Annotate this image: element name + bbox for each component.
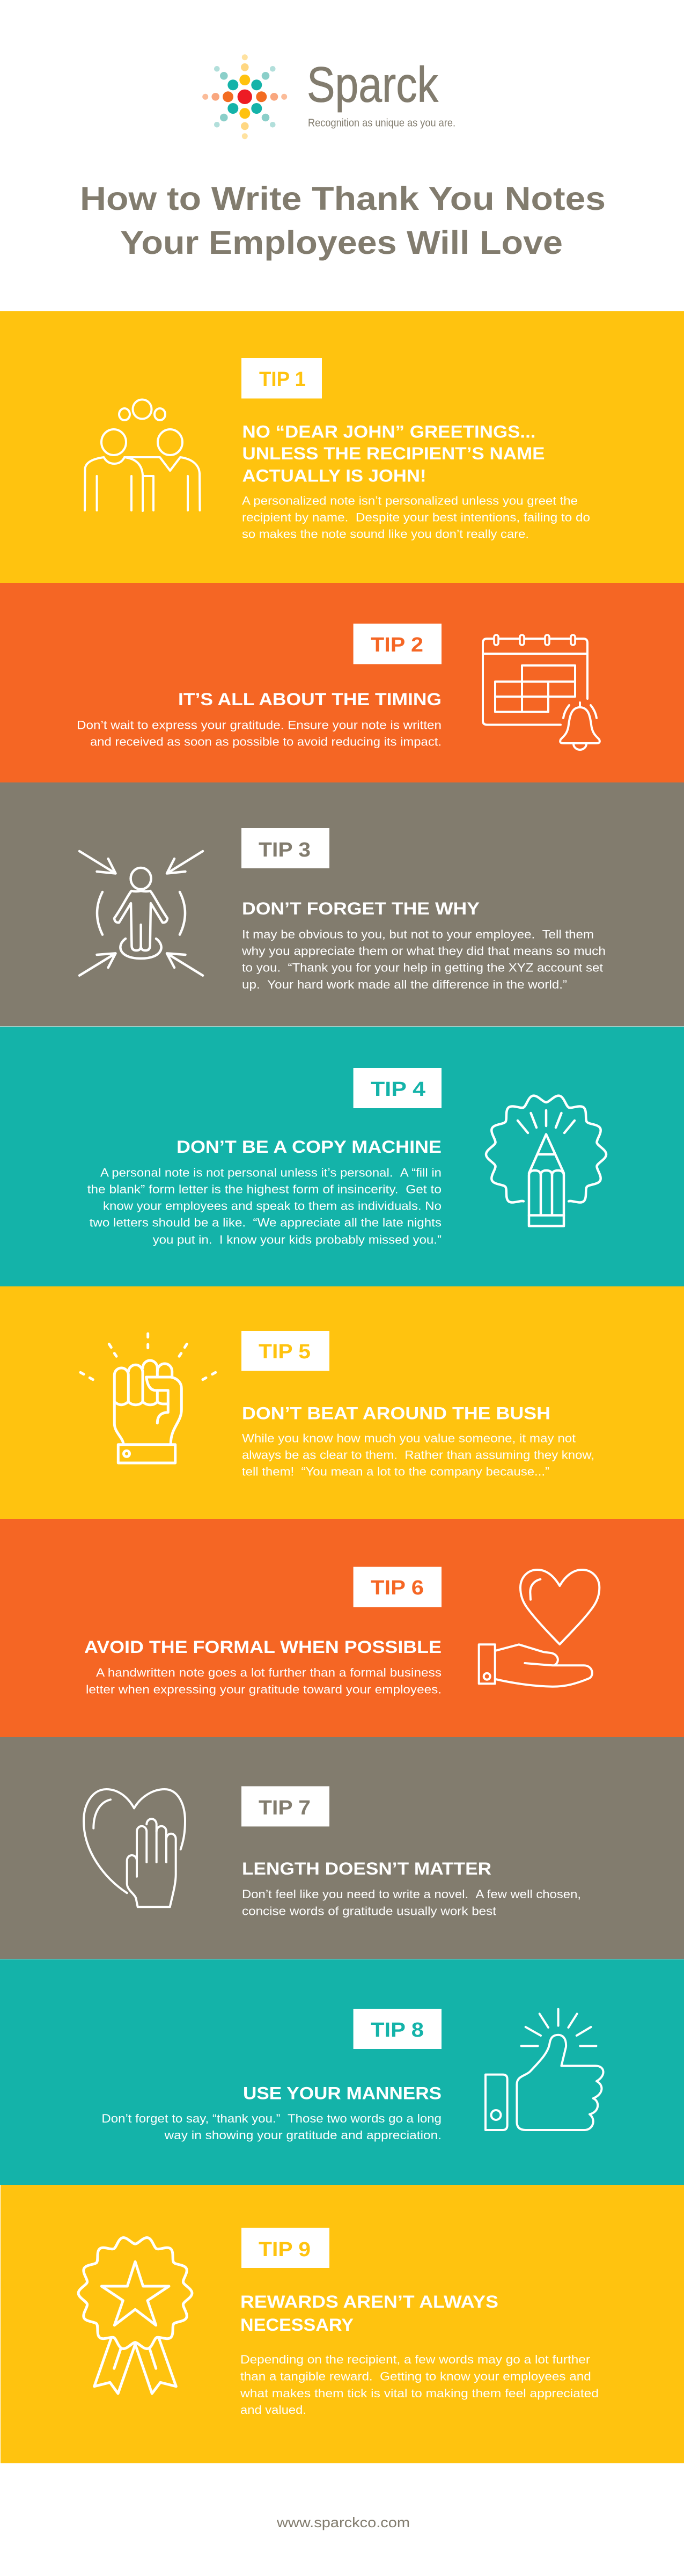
tip 4 text xyxy=(87,1166,442,1246)
tip 6 heading: AVOID THE FORMAL WHEN POSSIBLE xyxy=(84,1637,442,1657)
title xyxy=(80,180,606,261)
tip 1 badge: TIP 1 xyxy=(259,368,306,391)
logo mark: dots xyxy=(202,54,287,139)
tip 7 text xyxy=(242,1887,581,1918)
panel: tip 5 xyxy=(0,1286,684,1519)
tip 7 text: Don’t feel like you need to write a novel. A few well chosen, xyxy=(242,1887,581,1901)
icon: calendar with bell xyxy=(483,635,600,750)
tip 5 badge: TIP 5 xyxy=(259,1341,311,1363)
icon: pencil with burst xyxy=(486,1093,606,1226)
tip 1 text xyxy=(242,494,590,540)
logo tagline: Recognition as unique as you are. xyxy=(308,118,455,129)
tip 4 text: you put in. I know your kids probably missed you.” xyxy=(153,1233,442,1246)
tip 7 badge: TIP 7 xyxy=(259,1797,311,1819)
tip 4 text: know your employees and speak to them as individuals. No xyxy=(103,1199,442,1213)
tip 9 heading xyxy=(240,2292,498,2334)
tip 9 badge xyxy=(241,2228,329,2268)
tip 4 badge xyxy=(354,1068,442,1108)
tip 8 text: way in showing your gratitude and appreciation. xyxy=(164,2128,442,2142)
tip 1 heading: UNLESS THE RECIPIENT’S NAME xyxy=(242,444,545,463)
tip 8 text: Don’t forget to say, “thank you.” Those two words go a long xyxy=(101,2112,442,2125)
tip 3 heading: DON’T FORGET THE WHY xyxy=(242,899,480,918)
tip 3 text: to you. “Thank you for your help in getting the XYZ account set xyxy=(242,961,603,975)
tip 3 text: It may be obvious to you, but not to your employee. Tell them xyxy=(242,927,594,941)
tip 3 text xyxy=(241,927,606,991)
tip 2 text: Don’t wait to express your gratitude. Ensure your note is written xyxy=(77,719,442,732)
tip 3 text: up. Your hard work made all the difference in the world.” xyxy=(242,978,567,991)
tip 2 text xyxy=(77,719,442,749)
tip 1 heading xyxy=(242,422,545,485)
tip 3 badge xyxy=(241,828,329,868)
tip 5 text: always be as clear to them. Rather than assuming they know, xyxy=(242,1448,594,1462)
tip 6 text: letter when expressing your gratitude toward your employees. xyxy=(86,1682,442,1696)
tip 1 text: recipient by name. Despite your best intentions, failing to do xyxy=(242,511,590,524)
icon: two people with thought bubbles xyxy=(85,399,200,511)
tip 5 heading: DON’T BEAT AROUND THE BUSH xyxy=(242,1404,550,1423)
tip 5 badge xyxy=(241,1331,329,1371)
tip 3 badge: TIP 3 xyxy=(259,839,311,861)
tip 1 heading: NO “DEAR JOHN” GREETINGS... xyxy=(242,422,535,441)
tip 5 text xyxy=(242,1432,594,1478)
footer url: www.sparckco.com xyxy=(276,2514,410,2530)
tip 4 text: A personal note is not personal unless it’s personal. A “fill in xyxy=(100,1166,442,1180)
tip 1 text: so makes the note sound like you don’t really care. xyxy=(242,527,529,540)
tip 8 badge: TIP 8 xyxy=(371,2019,424,2041)
title: Your Employees Will Love xyxy=(120,224,563,261)
tip 5 text: While you know how much you value someone, it may not xyxy=(242,1432,576,1445)
icon: raised fist xyxy=(80,1334,216,1463)
tip 2 text: and received as soon as possible to avoid reducing its impact. xyxy=(90,735,442,749)
logo: Sparck xyxy=(202,54,455,139)
tip 6 text xyxy=(86,1666,442,1696)
icon: person with arrows xyxy=(79,851,203,976)
tip 3 text: why you appreciate them or what they did that means so much xyxy=(241,945,606,958)
tip 2 badge: TIP 2 xyxy=(371,634,423,656)
tip 4 heading: DON’T BE A COPY MACHINE xyxy=(176,1137,442,1157)
tip 9 text: Depending on the recipient, a few words may go a lot further xyxy=(240,2353,590,2366)
tip 9 heading: REWARDS AREN’T ALWAYS xyxy=(240,2292,498,2311)
tip 8 text xyxy=(101,2112,442,2142)
panel: tip 2 xyxy=(0,583,684,782)
title: How to Write Thank You Notes xyxy=(80,180,606,217)
tip 9 heading: NECESSARY xyxy=(240,2315,354,2334)
tip 6 text: A handwritten note goes a lot further than a formal business xyxy=(96,1666,442,1679)
tip 5 text: tell them! “You mean a lot to the company because...” xyxy=(242,1465,549,1478)
tip 8 badge xyxy=(354,2009,442,2049)
tip 9 text: than a tangible reward. Getting to know your employees and xyxy=(240,2369,591,2383)
panel: tip 4 xyxy=(0,1026,684,1286)
tip 9 text xyxy=(240,2353,599,2417)
panel: tip 9 xyxy=(1,2185,684,2463)
tip 9 badge: TIP 9 xyxy=(259,2238,311,2261)
icon: hand holding heart xyxy=(479,1570,599,1687)
tip 4 text: two letters should be a like. “We appreciate all the late nights xyxy=(90,1216,442,1230)
tip 1 badge xyxy=(241,358,322,398)
icon: thumbs up xyxy=(486,2009,604,2130)
tip 1 text: A personalized note isn’t personalized unless you greet the xyxy=(242,494,578,508)
icon: award ribbon with star xyxy=(78,2235,192,2394)
logo wordmark: Sparck xyxy=(307,56,438,112)
tip 6 badge: TIP 6 xyxy=(371,1577,424,1599)
tip 8 heading: USE YOUR MANNERS xyxy=(243,2083,442,2103)
panel: tip 8 xyxy=(0,1959,684,2185)
tip 9 text: what makes them tick is vital to making them feel appreciated xyxy=(240,2387,599,2400)
tip 9 text: and valued. xyxy=(240,2403,306,2417)
tip 4 text: the blank” form letter is the highest form of insincerity. Get to xyxy=(87,1183,442,1196)
tip 6 badge xyxy=(354,1567,442,1607)
tip 7 badge xyxy=(241,1786,329,1826)
tip 7 heading: LENGTH DOESN’T MATTER xyxy=(242,1859,491,1878)
tip 1 heading: ACTUALLY IS JOHN! xyxy=(242,466,426,485)
panel: tip 1 xyxy=(0,311,684,583)
tip 2 badge xyxy=(354,624,442,664)
panel: tip 7 xyxy=(0,1737,684,1959)
tip 4 badge: TIP 4 xyxy=(371,1078,425,1101)
tip 2 heading: IT’S ALL ABOUT THE TIMING xyxy=(178,690,442,709)
panel: tip 6 xyxy=(0,1519,684,1737)
panel: tip 3 xyxy=(0,782,684,1027)
icon: hand on heart xyxy=(84,1789,185,1907)
tip 7 text: concise words of gratitude usually work best xyxy=(242,1904,496,1918)
